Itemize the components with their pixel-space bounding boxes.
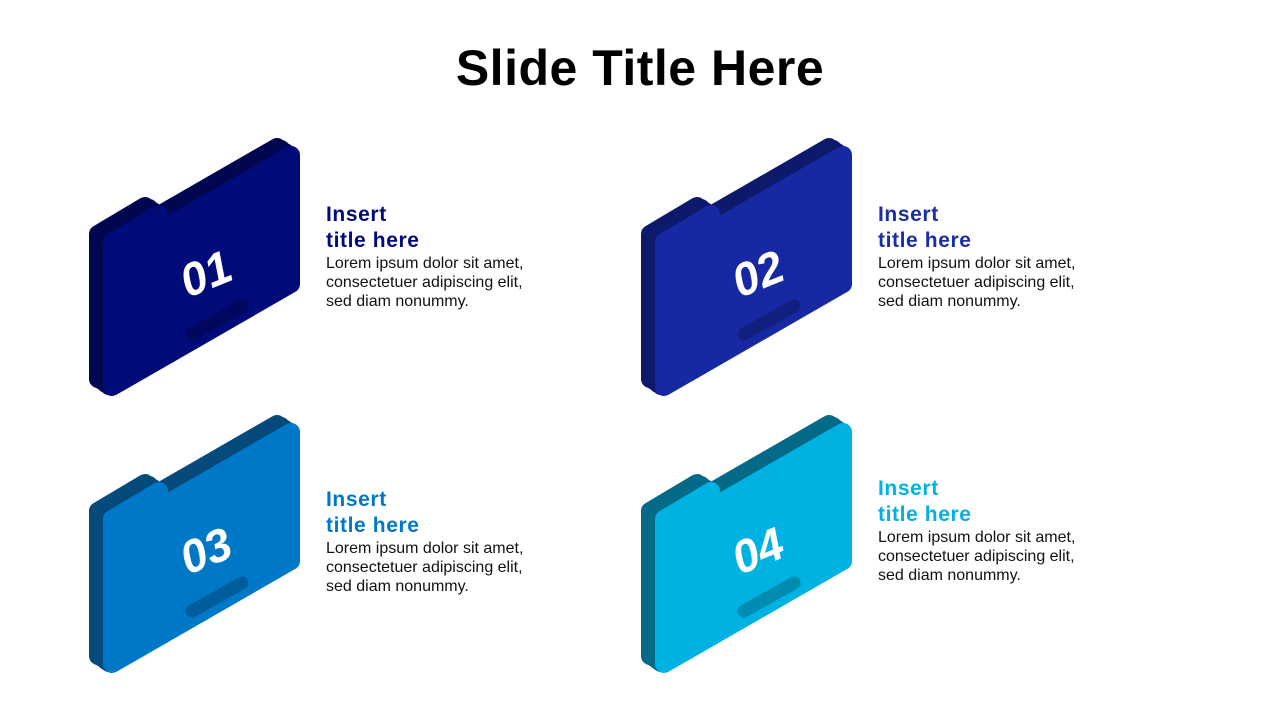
folder 02: 02 xyxy=(724,240,792,307)
folder 01 xyxy=(98,147,291,387)
text block 03: consectetuer adipiscing elit, xyxy=(326,559,523,576)
text block 04: consectetuer adipiscing elit, xyxy=(878,548,1075,565)
folder 04 xyxy=(650,424,843,664)
text block 03: Insert xyxy=(326,488,387,511)
text block 01 xyxy=(326,203,523,310)
text block 01: Lorem ipsum dolor sit amet, xyxy=(326,255,523,272)
text block 04: Lorem ipsum dolor sit amet, xyxy=(878,529,1075,546)
text block 01: title here xyxy=(326,229,420,252)
text block 01: Insert xyxy=(326,203,387,226)
folder 02 xyxy=(650,147,843,387)
text block 02: consectetuer adipiscing elit, xyxy=(878,274,1075,291)
text block 04: Insert xyxy=(878,477,939,500)
text block 03: sed diam nonummy. xyxy=(326,578,469,595)
text block 02 xyxy=(878,203,1075,310)
text block 02: sed diam nonummy. xyxy=(878,293,1021,310)
text block 04: sed diam nonummy. xyxy=(878,567,1021,584)
folder 01: 01 xyxy=(172,240,239,307)
text block 02: title here xyxy=(878,229,972,252)
text block 02: Lorem ipsum dolor sit amet, xyxy=(878,255,1075,272)
text block 04: title here xyxy=(878,503,972,526)
text block 03: Lorem ipsum dolor sit amet, xyxy=(326,540,523,557)
text block 01: sed diam nonummy. xyxy=(326,293,469,310)
text block 04 xyxy=(878,477,1075,584)
text block 03: title here xyxy=(326,514,420,537)
title: Slide Title Here xyxy=(456,40,824,96)
text block 03 xyxy=(326,488,523,595)
text block 01: consectetuer adipiscing elit, xyxy=(326,274,523,291)
folder 03 xyxy=(98,424,291,664)
folder 04: 04 xyxy=(724,517,791,584)
text block 02: Insert xyxy=(878,203,939,226)
folder 03: 03 xyxy=(172,517,240,584)
